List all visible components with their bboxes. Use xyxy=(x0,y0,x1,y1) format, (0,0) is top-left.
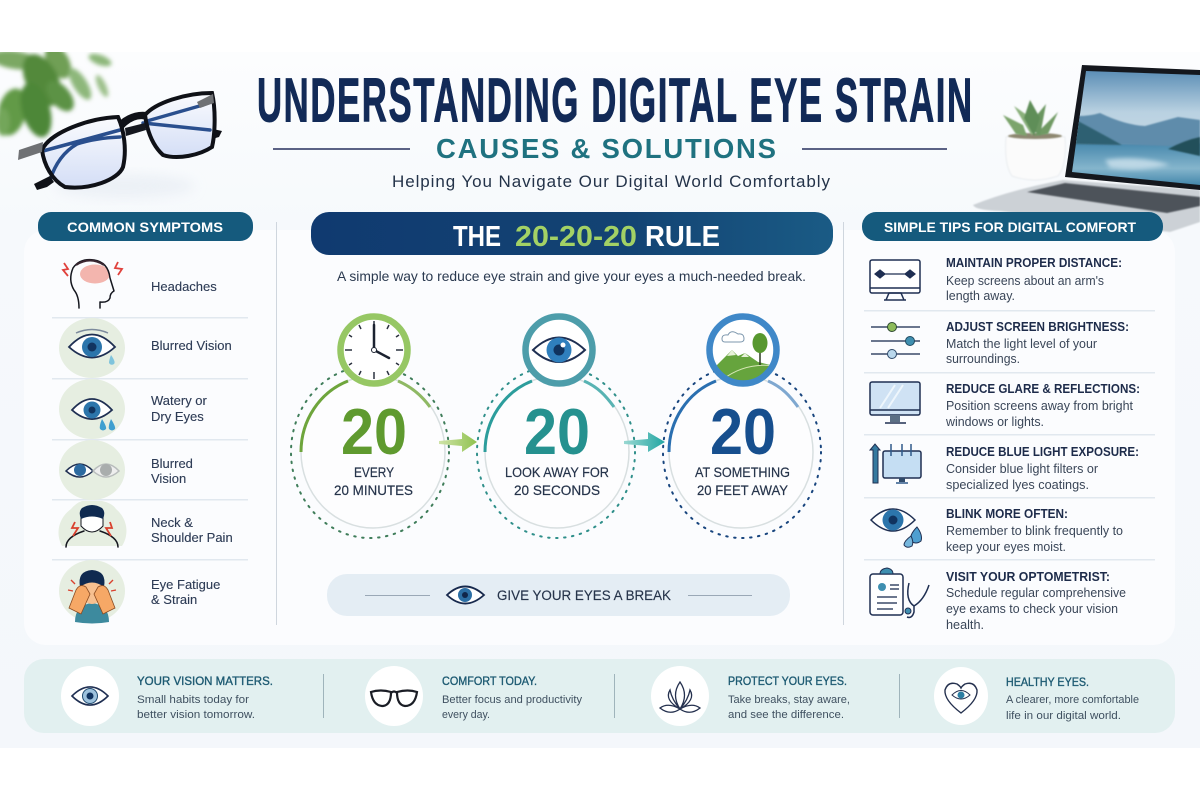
tip: reduce blue light exposure: specialized lyes coatings. xyxy=(946,478,1089,492)
icon: back of head and shoulders xyxy=(58,501,126,547)
heading: common symptoms: COMMON SYMPTOMS xyxy=(67,219,223,235)
footer item: your vision matters: better vision tomorrow. xyxy=(137,709,255,721)
icon: eye xyxy=(447,586,484,604)
footer item: protect your eyes: PROTECT YOUR EYES. xyxy=(728,674,847,688)
image: potted succulent xyxy=(1003,100,1065,180)
heading: common symptoms xyxy=(38,212,253,241)
tip: visit your optometrist: Schedule regular comprehensive xyxy=(946,586,1126,600)
tip: reduce blue light exposure xyxy=(870,444,1139,492)
tip: visit your optometrist: VISIT YOUR OPTOMETRIST: xyxy=(946,570,1110,584)
icon: eye with drops xyxy=(871,509,922,547)
tip: maintain proper distance: Keep screens about an arm's xyxy=(946,274,1104,288)
heading: the 20-20-20 rule: RULE xyxy=(645,221,720,253)
heading: simple tips: SIMPLE TIPS FOR DIGITAL COMFORT xyxy=(884,219,1136,235)
icon: mountains and tree xyxy=(710,316,776,384)
symptom: watery or dry eyes: Dry Eyes xyxy=(151,409,204,424)
panel: footer band xyxy=(24,659,1175,733)
label: 20 FEET AWAY xyxy=(697,482,789,498)
symptom: neck and shoulder pain xyxy=(58,501,233,547)
frame xyxy=(42,93,215,188)
tip: reduce glare and reflections xyxy=(870,382,1140,429)
footer item: comfort today: every day. xyxy=(442,709,490,721)
symptom: watery or dry eyes xyxy=(59,379,208,439)
tip: maintain proper distance: length away. xyxy=(946,289,1015,303)
icon: heart with eye xyxy=(934,667,988,725)
callout: give your eyes a break: GIVE YOUR EYES A BREAK xyxy=(497,588,671,603)
panel: 20-20-20 rule xyxy=(291,212,833,616)
footer item: healthy eyes: life in our digital world. xyxy=(1006,710,1121,722)
icon: eye with drops xyxy=(59,379,125,439)
tip: maintain proper distance xyxy=(870,256,1122,303)
symptom: headaches: Headaches xyxy=(151,279,217,294)
footer item: your vision matters xyxy=(61,666,273,726)
step 3: at something 20 feet away xyxy=(663,316,821,538)
tip: visit your optometrist: health. xyxy=(946,618,984,632)
symptom: blurred vision double: Blurred xyxy=(151,456,193,471)
label: LOOK AWAY FOR xyxy=(505,464,609,480)
icon: lotus xyxy=(651,666,709,726)
footer item: comfort today: Better focus and productivity xyxy=(442,694,583,706)
tip: adjust screen brightness: Match the light level of your xyxy=(946,337,1097,351)
subtitle with rules: CAUSES & SOLUTIONS xyxy=(436,133,776,164)
step 1: every 20 minutes xyxy=(291,316,449,538)
tip: reduce glare and reflections: Position screens away from bright xyxy=(946,399,1134,413)
footer item: protect your eyes: Take breaks, stay aware, xyxy=(728,694,850,706)
image: plant leaves xyxy=(0,52,114,140)
label: 20 SECONDS xyxy=(514,482,600,498)
tip: visit your optometrist xyxy=(870,568,1126,632)
heading: the 20-20-20 rule: THE xyxy=(453,221,501,253)
icon: person rubbing eyes xyxy=(59,560,125,624)
symptom: headaches xyxy=(63,260,217,308)
arrow: step 1 to 2 xyxy=(439,432,477,452)
tip: adjust screen brightness: ADJUST SCREEN BRIGHTNESS: xyxy=(946,320,1129,334)
symptom: blurred vision: Blurred Vision xyxy=(151,338,232,353)
symptom: eye fatigue and strain: Eye Fatigue xyxy=(151,577,220,592)
step 2: look away for 20 seconds xyxy=(477,316,635,538)
number: 20 xyxy=(524,395,590,468)
footer item: protect your eyes xyxy=(651,666,850,726)
tip: blink more often: Remember to blink frequently to xyxy=(946,524,1123,538)
icon: monitor with filter xyxy=(870,444,921,483)
label xyxy=(505,464,609,498)
icon: clipboard and stethoscope xyxy=(870,568,929,617)
tip: maintain proper distance: MAINTAIN PROPER DISTANCE: xyxy=(946,256,1122,270)
label xyxy=(334,464,413,498)
label: AT SOMETHING xyxy=(695,464,790,480)
label: 20 MINUTES xyxy=(334,482,413,498)
callout: give your eyes a break xyxy=(327,574,790,616)
temples xyxy=(43,105,210,180)
label xyxy=(695,464,790,498)
tip: reduce glare and reflections: windows or lights. xyxy=(945,415,1044,429)
symptom: eye fatigue and strain: & Strain xyxy=(151,592,197,607)
heading: the 20-20-20 rule: 20-20-20 xyxy=(515,221,637,253)
lenses xyxy=(42,117,125,188)
panel: simple tips xyxy=(862,212,1163,632)
image: blue-light glasses xyxy=(18,93,222,198)
icon: glasses xyxy=(365,666,423,726)
rule intro text: A simple way to reduce eye strain and give your eyes a much-needed break. xyxy=(337,268,806,284)
icon: glossy monitor xyxy=(870,382,920,423)
icon: monitor with arrows xyxy=(870,260,920,300)
heading: the 20-20-20 rule xyxy=(311,212,833,255)
footer item: comfort today xyxy=(365,666,583,726)
symptom: blurred vision xyxy=(59,318,232,378)
icon: eye xyxy=(526,316,592,384)
footer item: healthy eyes: A clearer, more comfortable xyxy=(1006,694,1139,706)
footer item: healthy eyes xyxy=(934,667,1139,725)
symptom: neck and shoulder pain: Shoulder Pain xyxy=(151,530,233,545)
tip: adjust screen brightness xyxy=(871,320,1129,366)
tip: blink more often: keep your eyes moist. xyxy=(946,540,1066,554)
tip: reduce blue light exposure: REDUCE BLUE LIGHT EXPOSURE: xyxy=(946,445,1139,459)
footer item: your vision matters: Small habits today for xyxy=(137,694,249,706)
tip: reduce blue light exposure: Consider blue light filters or xyxy=(946,462,1098,476)
title: UNDERSTANDING DIGITAL EYE STRAIN xyxy=(257,66,972,135)
panel: common symptoms xyxy=(38,212,253,624)
footer item: healthy eyes: HEALTHY EYES. xyxy=(1006,675,1089,689)
tip: adjust screen brightness: surroundings. xyxy=(946,352,1020,366)
tip: blink more often xyxy=(871,507,1123,554)
footer item: your vision matters: YOUR VISION MATTERS. xyxy=(137,674,273,688)
arrow: step 2 to 3 xyxy=(624,432,665,452)
footer item: protect your eyes: and see the difference. xyxy=(728,709,844,721)
icon: sliders xyxy=(871,322,920,358)
icon: eye xyxy=(61,666,119,726)
number: 20 xyxy=(341,395,407,468)
icon: head xyxy=(63,260,122,308)
symptom: blurred vision double xyxy=(59,440,193,500)
icon: clock xyxy=(340,316,408,384)
number: 20 xyxy=(710,395,776,468)
symptom: eye fatigue and strain xyxy=(59,560,220,624)
symptom: neck and shoulder pain: Neck & xyxy=(151,515,193,530)
symptom: blurred vision double: Vision xyxy=(151,471,186,486)
icon: sharp and blurred eye xyxy=(59,440,125,500)
symptom: watery or dry eyes: Watery or xyxy=(151,393,208,408)
heading: simple tips xyxy=(862,212,1163,241)
icon: eye with tear xyxy=(59,318,125,378)
label: EVERY xyxy=(354,464,395,480)
tip: reduce glare and reflections: REDUCE GLARE & REFLECTIONS: xyxy=(946,382,1140,396)
image: laptop xyxy=(973,65,1200,232)
tip: blink more often: BLINK MORE OFTEN: xyxy=(946,507,1068,521)
tip: visit your optometrist: eye exams to check your vision xyxy=(946,602,1118,616)
tagline: Helping You Navigate Our Digital World Comfortably xyxy=(392,172,830,191)
content card xyxy=(24,230,1175,645)
footer item: comfort today: COMFORT TODAY. xyxy=(442,674,537,688)
